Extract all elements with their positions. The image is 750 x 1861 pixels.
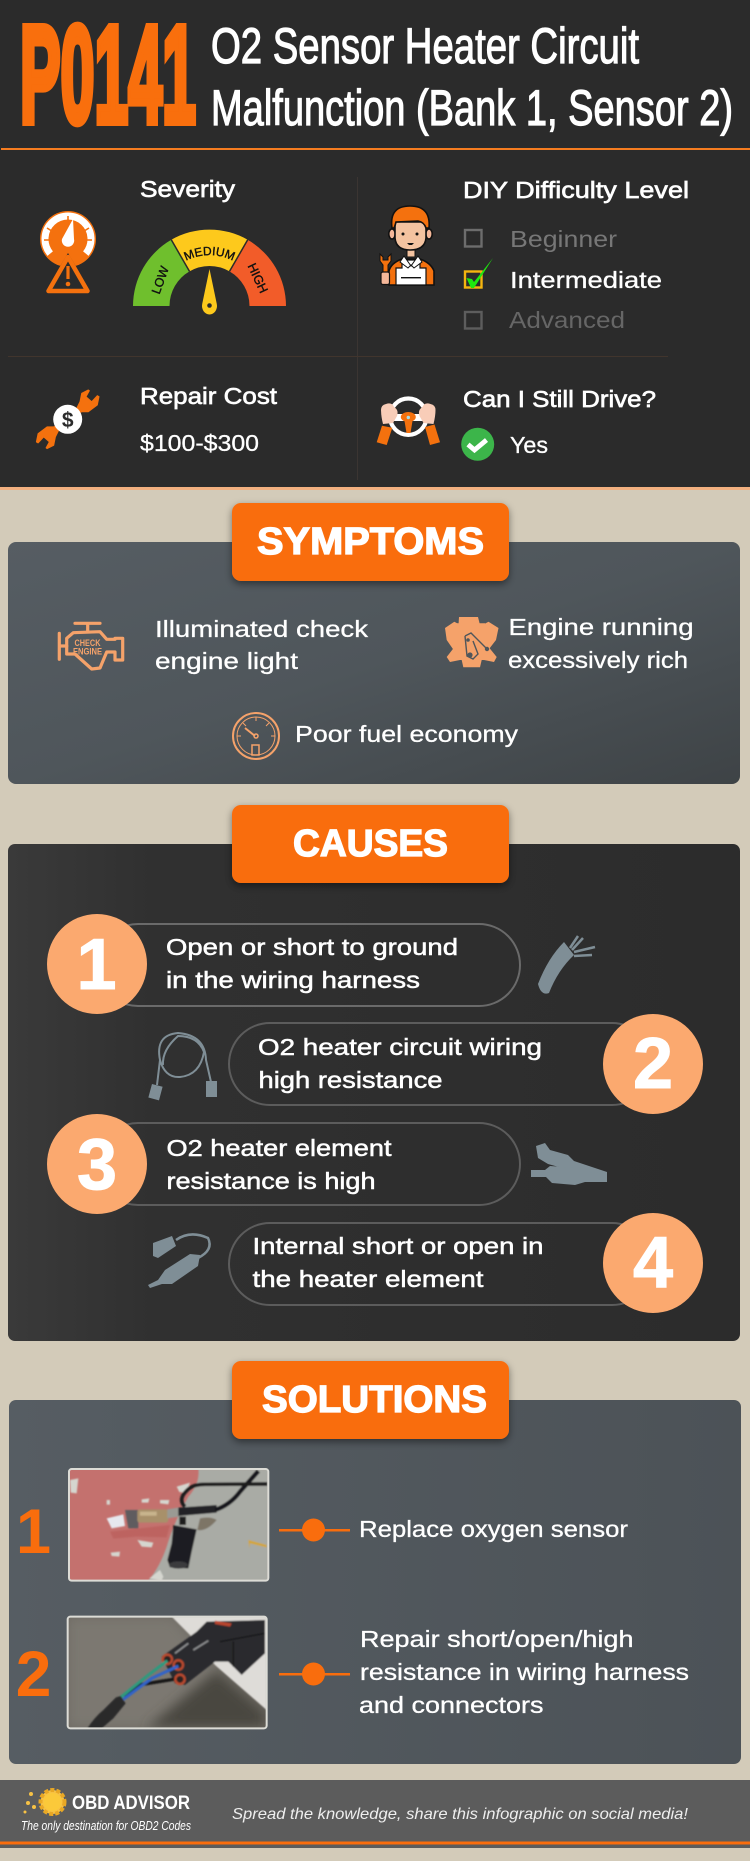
solution 2 text: and connectors: [359, 1692, 544, 1718]
cause 4: [148, 1213, 703, 1313]
header panel: P0141: [20, 0, 196, 152]
icon: steering wheel: [377, 398, 440, 445]
panel: symptoms: [8, 542, 740, 784]
difficulty checklist: Beginner: [510, 226, 617, 252]
heading: symptoms: [232, 503, 509, 581]
cause 4: the heater element: [252, 1266, 484, 1292]
icon: engine: [445, 617, 498, 667]
title text: [211, 18, 733, 136]
icon: plug sensor: [148, 1234, 210, 1288]
symptom 2 text: [508, 614, 694, 673]
icon: check engine: ENGINE: [73, 646, 102, 656]
symptom 1 text: engine light: [155, 648, 299, 674]
heading: symptoms: SYMPTOMS: [257, 521, 484, 563]
heading: severity: Severity: [140, 176, 235, 202]
icon: check engine: [59, 623, 123, 669]
repair cost: Repair Cost: [140, 383, 278, 409]
severity gauge: [133, 230, 286, 314]
panel: causes: [8, 844, 740, 1341]
heading: solutions: [232, 1361, 509, 1439]
cause 3: 3: [77, 1125, 117, 1205]
severity gauge: HIGH: [245, 261, 270, 295]
symptom 3 text: Poor fuel economy: [295, 721, 519, 747]
repair cost: [140, 383, 278, 456]
heading: causes: [232, 805, 509, 883]
icon: gauge warning: [40, 211, 96, 295]
cause 1: [47, 914, 595, 1014]
icon: mechanic: [380, 206, 434, 285]
photo: wiring connector: [68, 1617, 267, 1728]
photo: oxygen sensor: [69, 1469, 268, 1581]
icon: sensor cable: [150, 1033, 216, 1099]
repair cost: $100-$300: [140, 430, 259, 456]
symptom 1 text: Illuminated check: [155, 616, 369, 642]
cause 3: [47, 1114, 607, 1214]
heading: DIY difficulty: DIY Difficulty Level: [463, 177, 689, 203]
solution number 2: 2: [16, 1638, 51, 1710]
logo: gear: [24, 1790, 64, 1814]
header panel: [0, 0, 750, 490]
difficulty checklist: Intermediate: [510, 267, 662, 293]
difficulty checklist: Advanced: [509, 307, 625, 333]
symptom 1 text: [155, 616, 369, 674]
panel: solutions: [9, 1400, 741, 1764]
cause 4: Internal short or open in: [252, 1233, 544, 1259]
cause 2: [150, 1014, 703, 1114]
symptom 2 text: excessively rich: [508, 647, 688, 673]
cause 1: in the wiring harness: [166, 967, 420, 993]
cause 2: high resistance: [258, 1067, 442, 1093]
solution 1 text: Replace oxygen sensor: [359, 1516, 628, 1542]
cause 2: O2 heater circuit wiring: [258, 1034, 542, 1060]
severity gauge: LOW: [149, 264, 172, 296]
share message: Spread the knowledge, share this infographic on social media!: [232, 1806, 689, 1823]
severity gauge: MEDIUM: [184, 246, 236, 260]
solution 1 connector: [279, 1518, 350, 1542]
icon: wrench and dollar: $: [62, 409, 74, 432]
logo text: OBD ADVISOR: [72, 1793, 190, 1814]
solution 2 text: resistance in wiring harness: [360, 1659, 689, 1685]
solution 2 connector: [279, 1662, 350, 1686]
can I still drive: Yes: [510, 432, 548, 458]
cause 2: 2: [633, 1024, 673, 1104]
icon: check engine: CHECK: [74, 638, 101, 648]
cause 1: 1: [76, 925, 117, 1005]
solution number 1: 1: [16, 1497, 51, 1567]
icon: fuel gauge: [233, 713, 279, 759]
icon: wrench and dollar: [36, 390, 99, 449]
heading: solutions: SOLUTIONS: [262, 1379, 487, 1421]
footer: [0, 1780, 750, 1848]
icon: oxygen sensors: [531, 1143, 607, 1185]
cause 1: Open or short to ground: [166, 934, 458, 960]
can I still drive: [461, 386, 656, 461]
solution 2 text: Repair short/open/high: [360, 1626, 634, 1652]
solution 2 text: [359, 1626, 689, 1718]
tagline: The only destination for OBD2 Codes: [21, 1818, 191, 1833]
icon: stripped wire: [538, 936, 595, 994]
symptom 2 text: Engine running: [508, 614, 694, 640]
can I still drive: Can I Still Drive?: [463, 386, 656, 412]
cause 3: resistance is high: [166, 1168, 376, 1194]
difficulty checklist: [465, 226, 662, 333]
cause 4: 4: [633, 1223, 673, 1303]
heading: causes: CAUSES: [293, 823, 448, 865]
cause 3: O2 heater element: [166, 1135, 392, 1161]
